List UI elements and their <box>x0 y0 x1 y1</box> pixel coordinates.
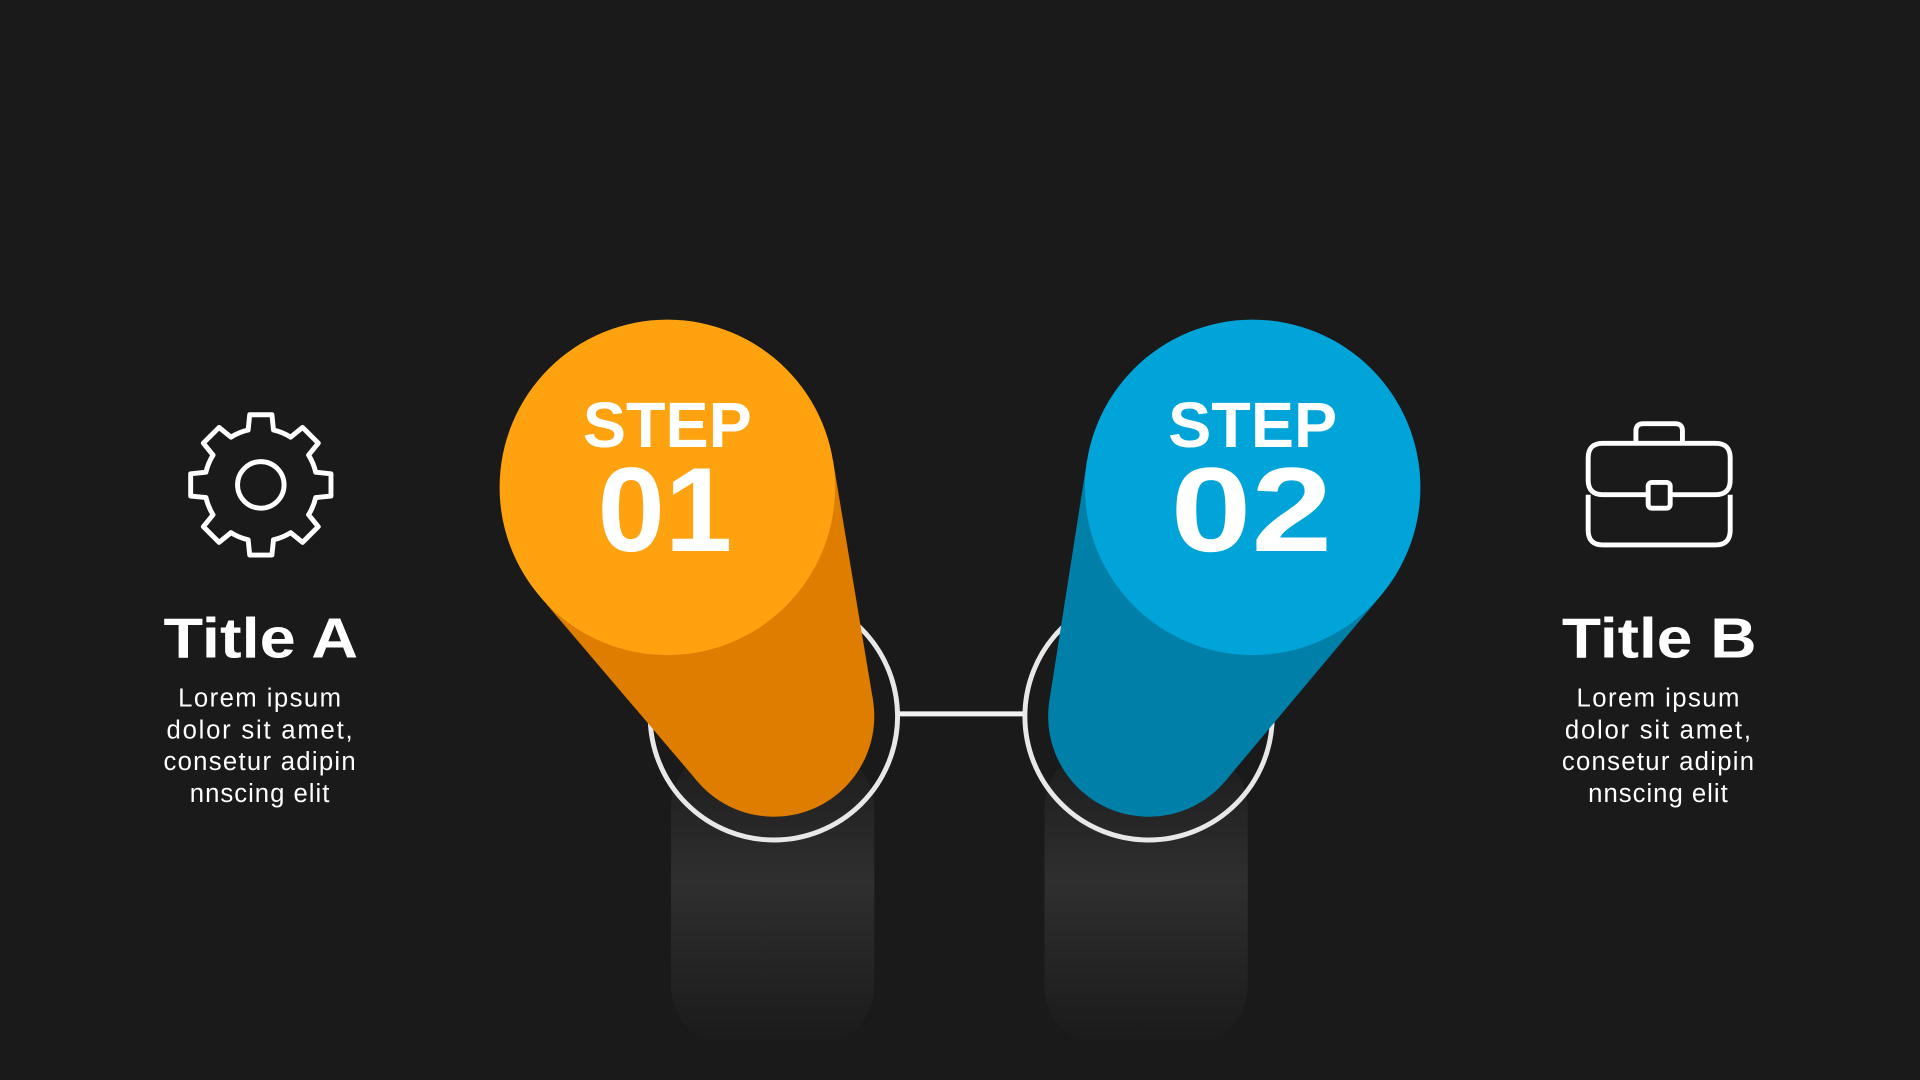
ring right <box>1025 593 1272 840</box>
text A: nnscing elit <box>190 780 329 808</box>
step 02 cylinder: 02 <box>1171 443 1332 577</box>
text B: dolor sit amet, <box>1565 716 1751 744</box>
icon: briefcase <box>1588 424 1730 545</box>
connector line <box>896 712 1026 716</box>
text B: nnscing elit <box>1588 780 1728 808</box>
text B: Lorem ipsum <box>1577 685 1739 713</box>
text B: consetur adipin <box>1562 748 1754 776</box>
pillar shadow right <box>1044 747 1248 1047</box>
step 01 cylinder <box>500 320 874 817</box>
step 01 cylinder: STEP <box>583 390 752 461</box>
text A: dolor sit amet, <box>167 716 353 744</box>
step 02 cylinder <box>1048 320 1420 817</box>
title B: Title B <box>1562 607 1757 670</box>
step 02 cylinder: STEP <box>1168 390 1337 461</box>
ring left <box>650 593 898 840</box>
text A: Lorem ipsum <box>178 685 341 713</box>
text A: consetur adipin <box>163 748 356 776</box>
icon: gear <box>190 414 332 556</box>
step 01 cylinder: 01 <box>598 443 732 577</box>
title A: Title A <box>163 607 358 670</box>
pillar shadow left <box>671 747 874 1047</box>
